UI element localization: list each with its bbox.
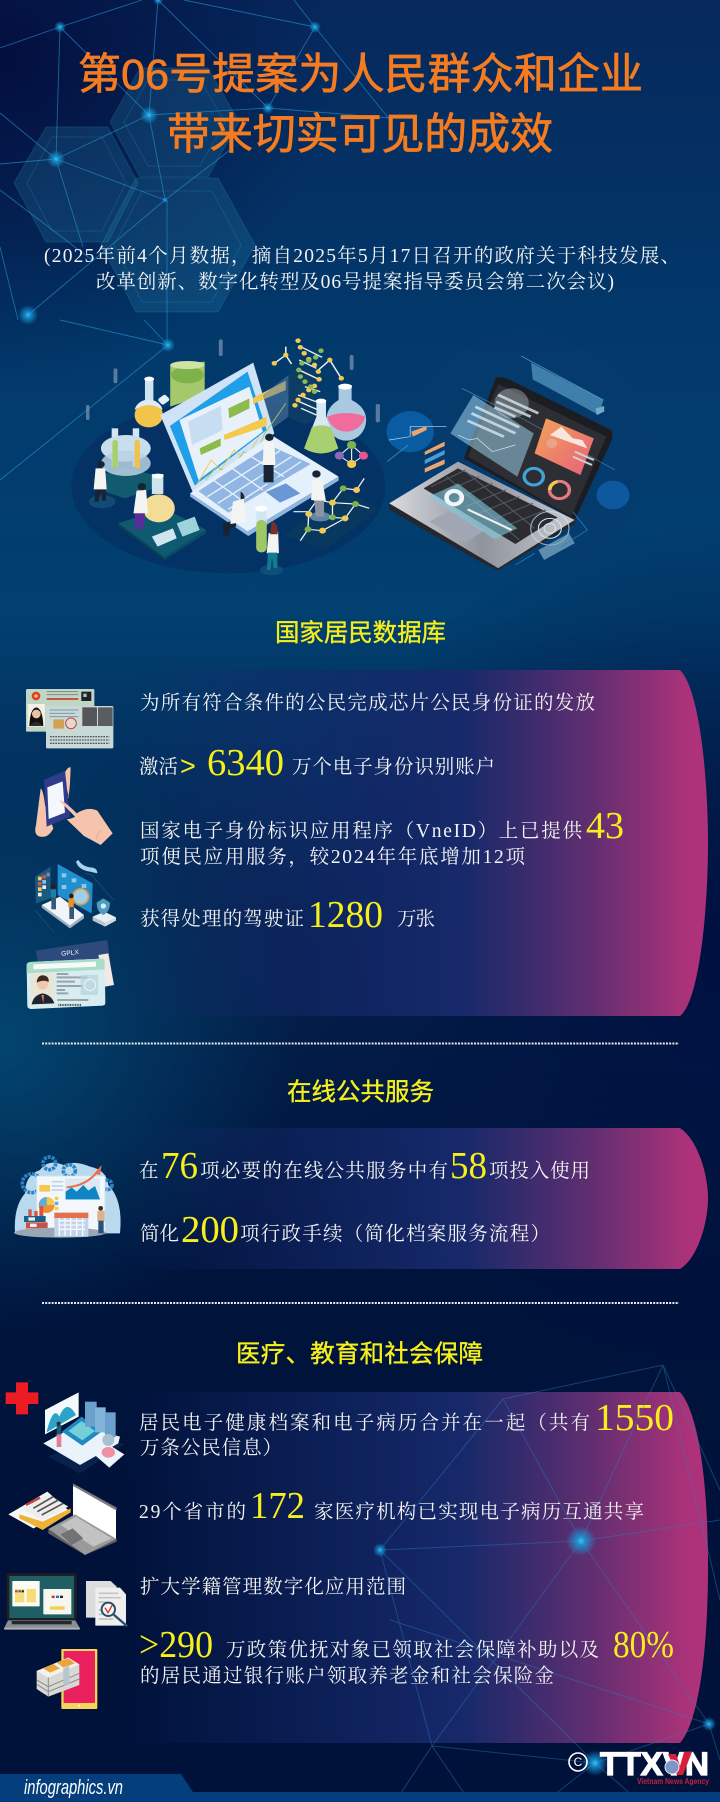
text: social security: 万政策优抚对象已领取社会保障补助以及 [226, 1639, 599, 1661]
text: activated accounts: 万个电子身份识别账户 [292, 756, 495, 778]
text: medical institutions [139, 1485, 644, 1527]
title: 带来切实可见的成效 [167, 111, 553, 159]
text: 76 services: 76 [161, 1145, 198, 1187]
text: VneID services: 国家电子身份标识应用程序（VneID）上已提供 [140, 820, 582, 842]
text: 76 services: 在 [139, 1160, 159, 1182]
text: driving licences: 万张 [397, 908, 435, 930]
text: social security: 的居民通过银行账户领取养老金和社会保险金 [140, 1665, 554, 1687]
text: social security: 80% [613, 1624, 674, 1666]
title: 第06号提案为人民群众和企业 [78, 51, 643, 99]
text: chip ID issued: 为所有符合条件的公民完成芯片公民身份证的发放 [140, 692, 595, 714]
icon: ID cards [26, 689, 113, 748]
text: health records: 万条公民信息） [140, 1437, 282, 1459]
text: 200 procedures [140, 1209, 550, 1251]
dna [272, 338, 344, 415]
subtitle: 改革创新、数字化转型及06号提案指导委员会第二次会议) [96, 271, 614, 293]
text: VneID services: 43 [586, 805, 624, 847]
text: driving licences: 1280 [308, 894, 383, 936]
scientists [89, 434, 331, 575]
text: health records: 1550 [595, 1397, 674, 1439]
text: medical institutions: 29个省市的 [139, 1501, 246, 1523]
panel: online public services [130, 1128, 708, 1269]
icon: online services dashboard [14, 1157, 121, 1238]
text: 76 services: 项投入使用 [489, 1160, 590, 1182]
icon: red cross and data centre [6, 1382, 125, 1473]
text: 200 procedures: 简化 [140, 1223, 179, 1245]
hexagon pattern [14, 68, 255, 312]
text: student records: 扩大学籍管理数字化应用范围 [140, 1576, 406, 1598]
text: VneID services: 项便民应用服务，较2024年年底增加12项 [140, 846, 525, 868]
text: activated accounts: 激活 [139, 756, 178, 778]
section heading: online public services: 在线公共服务 [287, 1078, 434, 1106]
text: medical institutions: 172 [250, 1485, 305, 1527]
logo: TTXVN [569, 1746, 709, 1786]
network lines top [0, 0, 390, 480]
text: 200 procedures: 200 [181, 1209, 239, 1251]
panel: healthcare, education, social security [130, 1392, 708, 1743]
divider [42, 1302, 679, 1304]
green flask [304, 399, 338, 453]
green test tube [255, 506, 267, 552]
text: VneID services [140, 805, 624, 868]
text: activated accounts: > [180, 751, 196, 781]
logo: TTXVN: C [574, 1755, 583, 1769]
text: driving licences: 获得处理的驾驶证 [140, 908, 304, 930]
subtitle: (2025年前4个月数据，摘自2025年5月17日召开的政府关于科技发展、 [44, 245, 680, 267]
text: activated accounts [139, 742, 495, 784]
footer bar [0, 1774, 720, 1802]
website label: infographics.vn [24, 1777, 123, 1799]
text: driving licences [140, 894, 435, 936]
title [78, 51, 643, 159]
yellow flask [135, 377, 170, 427]
icon: digital platform [35, 860, 116, 932]
test tube rack [94, 428, 154, 498]
divider [42, 1042, 679, 1044]
text: health records: 居民电子健康档案和电子病历合并在一起（共有 [139, 1412, 590, 1434]
dark cylinder under dna [289, 370, 314, 423]
section heading: healthcare, education, social security: 医疗、教育和社会保障 [236, 1340, 483, 1368]
text: health records [139, 1397, 674, 1459]
icon: laptop and document search [4, 1573, 127, 1709]
text: 76 services [139, 1145, 590, 1187]
text: 76 services: 58 [450, 1145, 487, 1187]
text: social security: >290 [139, 1624, 213, 1666]
illustration: science laptop and digital laptop [71, 333, 647, 575]
logo: TTXVN: Vietnam News Agency [637, 1777, 709, 1786]
text: activated accounts: 6340 [207, 742, 284, 784]
laptop [160, 363, 339, 536]
icon: driving licence: GPLX [61, 949, 80, 958]
network lines bottom [373, 1365, 720, 1802]
icon: records and laptop [8, 1483, 117, 1555]
pink flask [326, 384, 366, 441]
icon: driving licence [27, 940, 114, 1009]
panel: national database [130, 670, 708, 1016]
text: 76 services: 项必要的在线公共服务中有 [200, 1160, 448, 1182]
text: 200 procedures: 项行政手续（简化档案服务流程） [240, 1223, 550, 1245]
digital laptop scene [386, 333, 647, 573]
molecule small [335, 441, 368, 468]
icon: hand with phone [35, 767, 113, 845]
balance scale with flask [118, 474, 206, 560]
section heading: national database: 国家居民数据库 [275, 619, 446, 647]
text: medical institutions: 家医疗机构已实现电子病历互通共享 [314, 1501, 644, 1523]
hexagon molecule [284, 478, 380, 550]
subtitle [44, 245, 680, 293]
science lab scene [71, 338, 385, 575]
text: social security [139, 1624, 674, 1687]
green beaker [170, 361, 205, 407]
logo: TTXVN: TTXVN [600, 1746, 709, 1782]
